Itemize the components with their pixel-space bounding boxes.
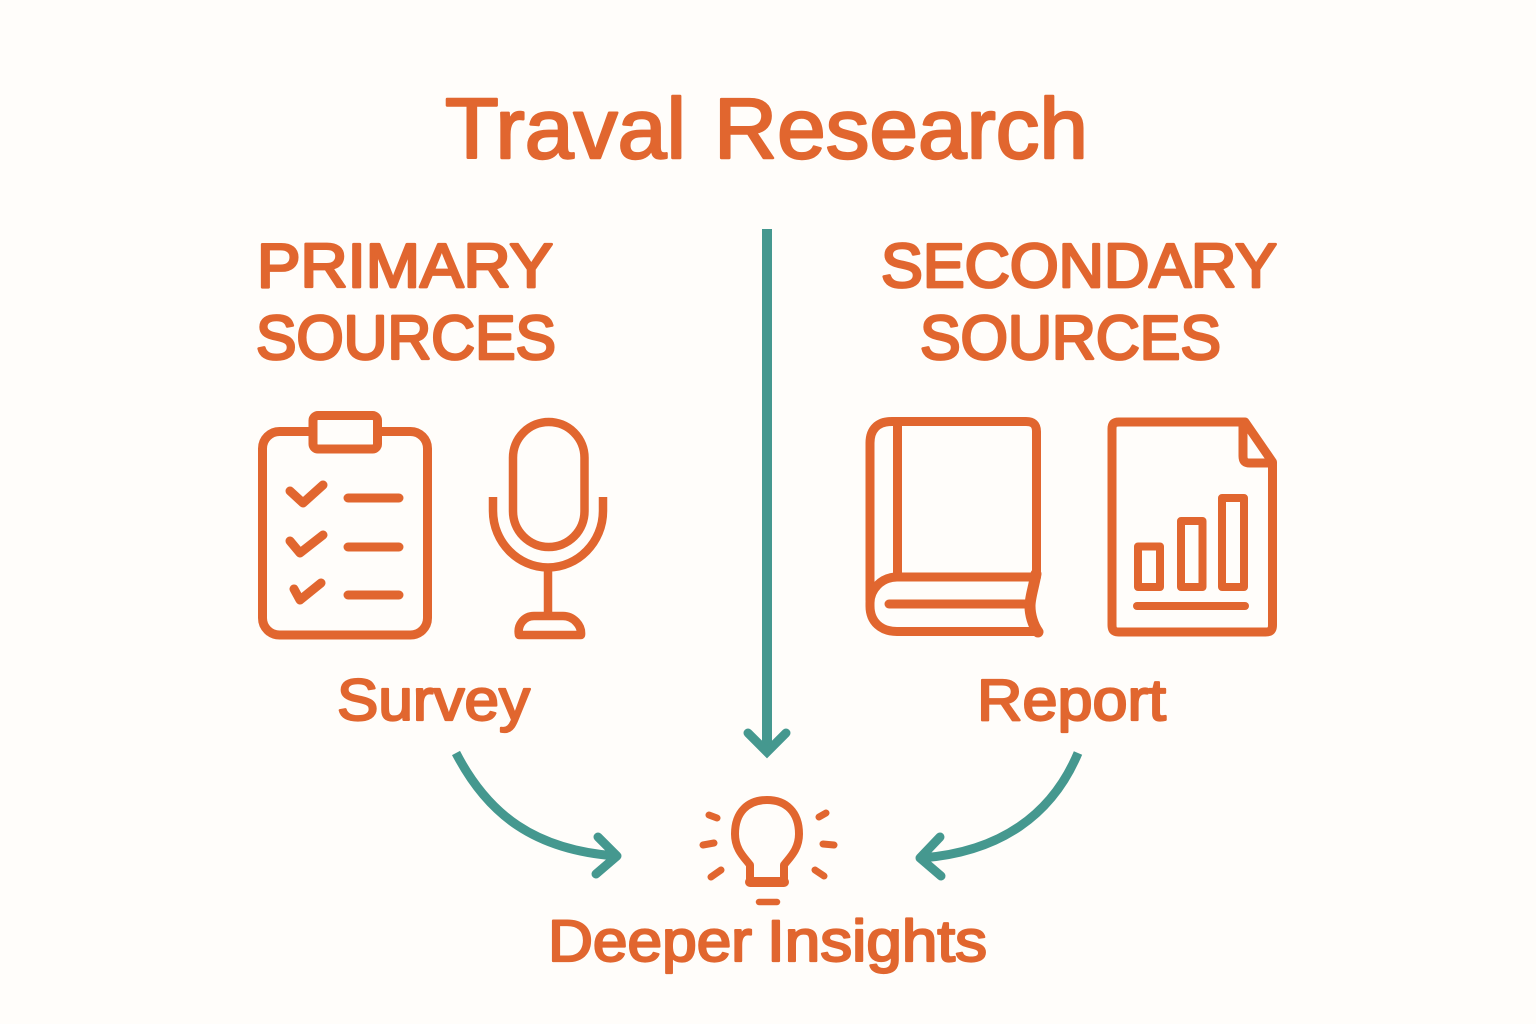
arrow: survey to insights bbox=[456, 753, 617, 874]
label: deeper insights bbox=[548, 909, 987, 974]
icon: clipboard checklist bbox=[262, 416, 428, 635]
heading: secondary sources: SECONDARY bbox=[881, 232, 1277, 301]
icon: lightbulb bbox=[703, 800, 834, 902]
title: Research bbox=[714, 82, 1088, 177]
heading: primary sources: PRIMARY bbox=[257, 232, 553, 301]
icon: microphone bbox=[493, 422, 603, 635]
arrow: centre divider down bbox=[748, 229, 786, 752]
title: Traval bbox=[445, 82, 686, 177]
heading: secondary sources: SOURCES bbox=[920, 304, 1221, 373]
heading: primary sources: SOURCES bbox=[256, 304, 556, 373]
title bbox=[445, 82, 1088, 177]
label: deeper insights: Deeper bbox=[548, 909, 752, 974]
label: report: Report bbox=[977, 668, 1166, 733]
label: deeper insights: Insights bbox=[767, 909, 987, 974]
heading: secondary sources bbox=[881, 232, 1277, 373]
label: survey: Survey bbox=[337, 668, 530, 733]
icon: book bbox=[870, 422, 1038, 632]
heading: primary sources bbox=[256, 232, 556, 373]
icon: report with bar chart bbox=[1112, 422, 1272, 632]
arrow: report to insights bbox=[920, 753, 1078, 876]
